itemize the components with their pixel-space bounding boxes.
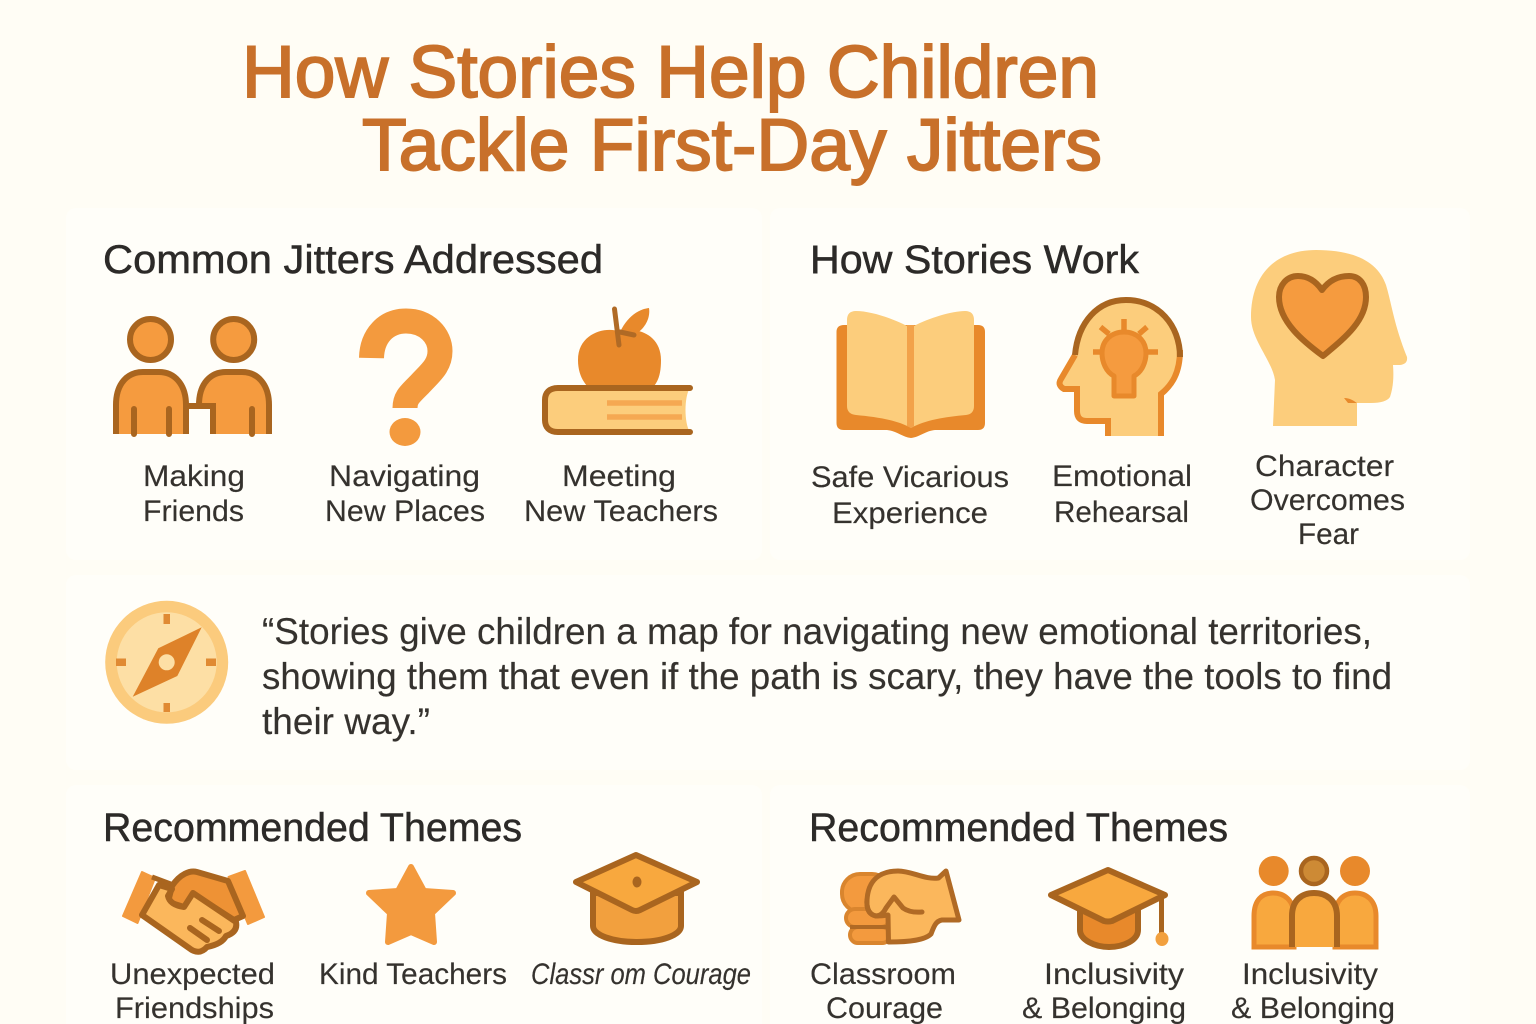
label: meeting new teachers: New Teachers [524, 495, 718, 528]
heading: recommended themes: Recommended Themes [103, 806, 522, 850]
label: inclusivity and belonging [1022, 958, 1186, 1024]
icon: graduation cap [576, 855, 697, 942]
panel: recommended themes left [66, 785, 762, 1024]
icon: three people [1254, 856, 1376, 947]
panel: quote [66, 575, 1470, 770]
label: character overcomes fear: Character [1255, 450, 1394, 483]
label: safe vicarious experience: Experience [832, 497, 988, 530]
label: making friends: Making [143, 460, 245, 493]
icon: two friends [116, 319, 269, 434]
label: unexpected friendships [110, 958, 275, 1024]
label: making friends [143, 460, 245, 528]
quote text: showing them that even if the path is scary, they have the tools to find [262, 656, 1392, 697]
heading: recommended themes: Recommended Themes [809, 806, 1228, 850]
label: emotional rehearsal [1052, 460, 1192, 529]
label: navigating new places [325, 460, 485, 528]
label: character overcomes fear: Fear [1298, 518, 1359, 551]
label: kind teachers: Kind Teachers [319, 958, 507, 991]
quote text [262, 611, 1392, 742]
label: safe vicarious experience: Safe Vicarious [811, 461, 1009, 494]
quote text: “Stories give children a map for navigating new emotional territories, [262, 611, 1372, 652]
panel: common jitters addressed [66, 208, 762, 560]
label: inclusivity and belonging second [1231, 958, 1395, 1024]
label: character overcomes fear [1250, 450, 1405, 551]
icon: head with heart [1251, 250, 1407, 426]
label: classroom courage [810, 958, 956, 1024]
title: How Stories Help Children [242, 32, 1099, 113]
icon: handshake [123, 871, 264, 952]
icon: star [369, 867, 453, 942]
label: meeting new teachers: Meeting [562, 460, 676, 493]
icon: open book [836, 311, 985, 438]
icon: fist bump hand [842, 871, 959, 943]
quote text: their way.” [262, 701, 430, 742]
icon: graduation cap with tassel [1051, 870, 1168, 947]
label: inclusivity and belonging: Inclusivity [1044, 958, 1184, 991]
label: inclusivity and belonging second: Inclusivity [1242, 958, 1378, 991]
label: classroom courage: Classroom [810, 958, 956, 991]
label: classroom courage: Classr om Courage [531, 958, 751, 991]
panel: how stories work [770, 208, 1470, 560]
label: safe vicarious experience [811, 461, 1009, 530]
heading: how stories work: How Stories Work [810, 238, 1140, 282]
label: emotional rehearsal: Emotional [1052, 460, 1192, 493]
label: character overcomes fear: Overcomes [1250, 484, 1405, 517]
label: navigating new places: Navigating [329, 460, 480, 493]
label: unexpected friendships: Unexpected [110, 958, 275, 991]
heading: common jitters: Common Jitters Addressed [103, 238, 603, 282]
title: Tackle First-Day Jitters [362, 105, 1102, 186]
label: emotional rehearsal: Rehearsal [1054, 496, 1189, 529]
icon: head with lightbulb [1060, 300, 1180, 436]
icon: question mark [372, 321, 440, 446]
label: meeting new teachers [524, 460, 718, 528]
title [242, 32, 1102, 186]
label: navigating new places: New Places [325, 495, 485, 528]
label: making friends: Friends [143, 495, 244, 528]
panel: recommended themes right [770, 785, 1470, 1024]
icon: compass [105, 601, 228, 724]
icon: apple on book [545, 308, 690, 432]
